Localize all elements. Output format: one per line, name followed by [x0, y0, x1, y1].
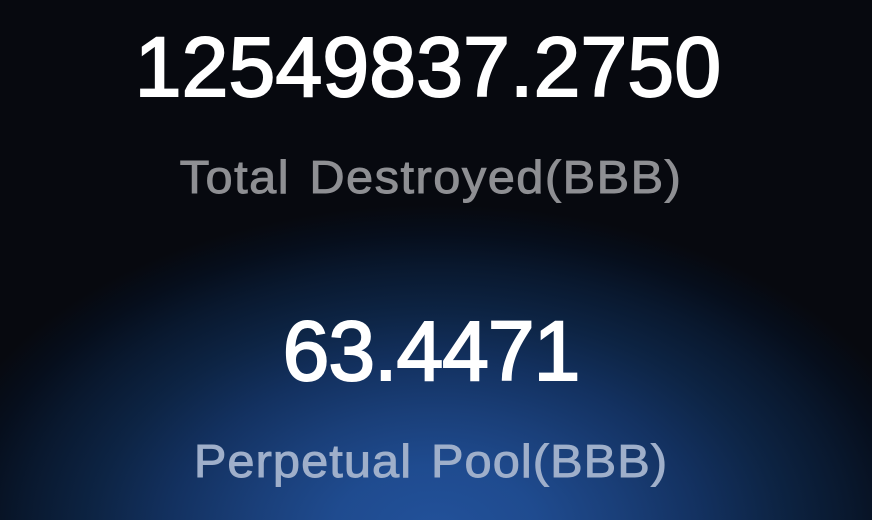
total destroyed label: Total Destroyed(BBB): [180, 151, 682, 203]
perpetual pool value: 63.4471: [283, 304, 579, 398]
total destroyed value: 12549837.2750: [135, 20, 721, 114]
perpetual pool label: Perpetual Pool(BBB): [194, 435, 668, 487]
